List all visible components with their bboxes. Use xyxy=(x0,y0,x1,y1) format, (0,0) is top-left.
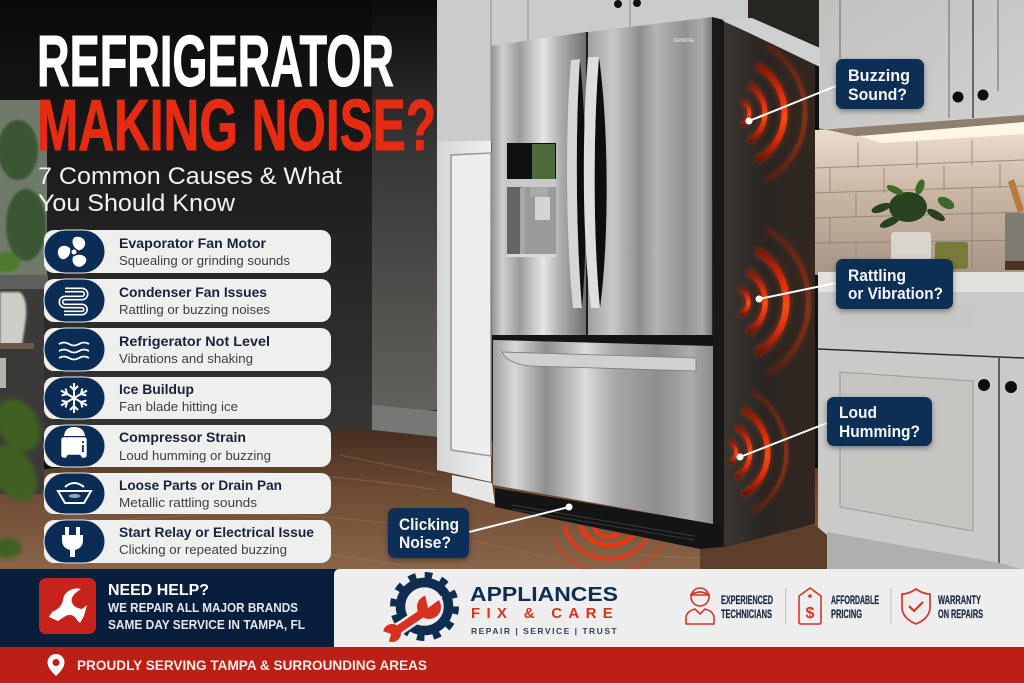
ice and water dispenser xyxy=(507,143,556,257)
callout: buzzing sound: Buzzing xyxy=(848,66,910,85)
cause 5: compressor strain xyxy=(44,425,331,467)
callout: loud humming: Humming? xyxy=(839,422,920,441)
badge: affordable pricing xyxy=(799,588,879,624)
decor: plant, bowl and utensil jar xyxy=(870,178,1024,270)
title: MAKING NOISE? xyxy=(37,86,436,166)
help text: WE REPAIR ALL MAJOR BRANDS xyxy=(108,601,298,615)
drawer handle xyxy=(502,352,696,371)
logo wordmark: APPLIANCES xyxy=(470,584,618,606)
icon: location pin xyxy=(48,654,64,676)
door handles xyxy=(567,57,607,308)
subtitle xyxy=(38,163,342,217)
right door xyxy=(588,17,712,340)
cause 1: evaporator fan motor: Squealing or grinding sounds xyxy=(119,254,290,268)
cause 4: ice buildup: Fan blade hitting ice xyxy=(119,400,238,414)
logo wordmark: FIX & CARE xyxy=(471,605,619,622)
cause 2: condenser fan issues: Rattling or buzzing noises xyxy=(119,303,270,317)
callout: rattling or vibration: Rattling xyxy=(848,266,906,285)
sound waves upper xyxy=(742,46,805,180)
panel: list of seven causes xyxy=(44,230,331,563)
badge: experienced technicians xyxy=(686,588,773,624)
cause 7: start relay or electrical issue: Clicking or repeated buzzing xyxy=(119,543,287,557)
freezer drawer xyxy=(493,340,713,524)
cause 5: compressor strain: Compressor Strain xyxy=(119,430,246,445)
badge: warranty on repairs: ON REPAIRS xyxy=(938,609,983,621)
help text: NEED HELP? xyxy=(108,582,209,599)
sound waves under the fridge xyxy=(555,525,664,573)
cause 3: refrigerator not level: Vibrations and shaking xyxy=(119,352,253,366)
callout: rattling or vibration: or Vibration? xyxy=(848,284,943,303)
callout: loud humming xyxy=(827,397,932,446)
leader lines and dots xyxy=(469,86,836,532)
badge: experienced technicians: EXPERIENCED xyxy=(721,595,773,607)
logo wordmark: REPAIR | SERVICE | TRUST xyxy=(471,626,618,636)
badge: warranty on repairs xyxy=(902,589,983,624)
cause 6: loose parts or drain pan xyxy=(44,473,331,514)
refrigerator xyxy=(491,17,820,573)
fridge side panel xyxy=(712,17,815,548)
sound waves lower xyxy=(730,392,786,512)
background: kitchen cabinets and backsplash xyxy=(437,0,1024,570)
black base grille xyxy=(495,488,722,549)
callout: buzzing sound: Sound? xyxy=(848,85,907,104)
cause 3: refrigerator not level: Refrigerator Not Level xyxy=(119,334,270,349)
left door xyxy=(491,32,586,338)
cause 4: ice buildup: Ice Buildup xyxy=(119,382,194,397)
badge: warranty on repairs: WARRANTY xyxy=(938,595,981,607)
logo: gear and wrench xyxy=(380,576,456,645)
icon: wrench on red tile xyxy=(39,578,96,634)
callout: clicking noise: Noise? xyxy=(399,533,451,552)
cause 7: start relay or electrical issue xyxy=(44,520,331,563)
callout: loud humming: Loud xyxy=(839,403,877,422)
cause 1: evaporator fan motor xyxy=(44,230,331,273)
title: REFRIGERATOR xyxy=(37,22,394,102)
panel: company and trust badges xyxy=(334,569,1024,647)
help text: SAME DAY SERVICE IN TAMPA, FL xyxy=(108,618,305,632)
panel: need help xyxy=(0,569,340,647)
footer banner xyxy=(0,647,1024,683)
subtitle: 7 Common Causes & What xyxy=(38,163,342,190)
background: left room xyxy=(0,0,840,570)
cause 6: loose parts or drain pan: Metallic rattling sounds xyxy=(119,496,257,510)
cause 2: condenser fan issues: Condenser Fan Issues xyxy=(119,285,267,300)
brand mark: KENMORE xyxy=(674,38,695,44)
badge: affordable pricing: $ xyxy=(806,605,815,622)
cabinet knobs above fridge xyxy=(614,0,641,8)
subtitle: You Should Know xyxy=(38,190,236,217)
help text xyxy=(108,582,305,632)
badge: affordable pricing: AFFORDABLE xyxy=(831,595,879,607)
callout: rattling or vibration xyxy=(836,259,953,309)
callout: clicking noise: Clicking xyxy=(399,515,459,534)
cause 1: evaporator fan motor: Evaporator Fan Motor xyxy=(119,236,267,251)
sound waves middle xyxy=(740,230,809,374)
title xyxy=(37,22,436,166)
cause 3: refrigerator not level xyxy=(44,328,331,371)
cause 4: ice buildup xyxy=(44,377,331,419)
cause 5: compressor strain: Loud humming or buzzing xyxy=(119,449,271,463)
badge: experienced technicians: TECHNICIANS xyxy=(721,609,772,621)
cause 6: loose parts or drain pan: Loose Parts or Drain Pan xyxy=(119,478,282,493)
cause 7: start relay or electrical issue: Start Relay or Electrical Issue xyxy=(119,525,315,540)
cause 2: condenser fan issues xyxy=(44,279,331,322)
callout: buzzing sound xyxy=(836,59,924,109)
logo wordmark xyxy=(470,584,619,636)
footer text: PROUDLY SERVING TAMPA & SURROUNDING AREAS xyxy=(77,657,427,673)
badge: affordable pricing: PRICING xyxy=(831,609,862,621)
callout: clicking noise xyxy=(388,508,469,558)
